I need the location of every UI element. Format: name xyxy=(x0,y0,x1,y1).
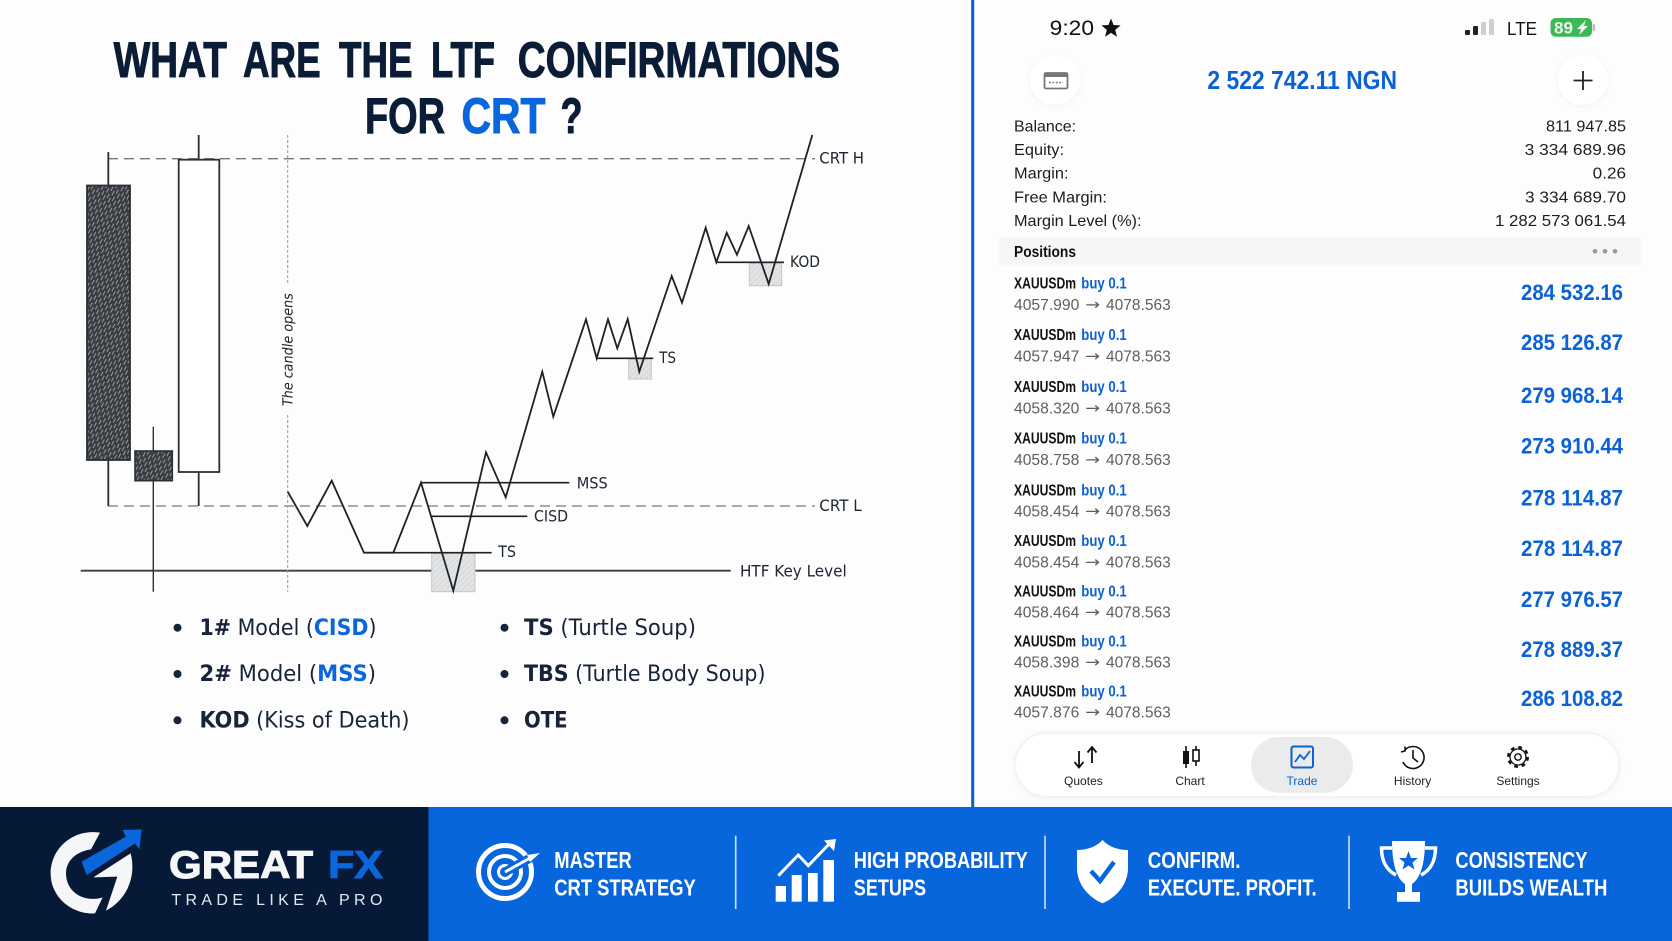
position 5: 278 114.87 xyxy=(1521,486,1623,511)
position 6: buy 0.1 xyxy=(1081,533,1127,550)
position 5: 4058.454 xyxy=(1014,504,1079,521)
feature: high probability setups xyxy=(776,839,1028,902)
account summary: Margin Level (%): xyxy=(1014,213,1142,230)
position 9: 286 108.82 xyxy=(1521,686,1623,711)
position 7: 277 976.57 xyxy=(1521,587,1623,612)
bearish large candle xyxy=(87,152,130,506)
tab labels: Settings xyxy=(1496,774,1540,788)
position 7 xyxy=(1014,583,1623,622)
position 6: → xyxy=(1085,553,1100,571)
bullet list: models: KOD (Kiss of Death) xyxy=(200,709,410,734)
icon: wallet button xyxy=(1030,55,1080,105)
chart labels: KOD xyxy=(790,252,820,271)
feature: master CRT strategy: CRT STRATEGY xyxy=(554,874,696,900)
chart labels: CRT H xyxy=(819,148,864,168)
brand name: GREAT xyxy=(169,844,313,887)
icon: growth chart xyxy=(776,839,836,902)
feature: consistency builds wealth xyxy=(1382,841,1607,902)
position 6 xyxy=(1014,533,1623,571)
tab labels xyxy=(1064,774,1540,788)
position 1: 284 532.16 xyxy=(1521,280,1623,305)
position 8: buy 0.1 xyxy=(1081,633,1127,650)
CRT H dashed level xyxy=(108,158,815,160)
brand name: FX xyxy=(328,844,383,887)
chart labels: CRT L xyxy=(819,496,862,515)
position 3: XAUUSDm xyxy=(1014,379,1076,396)
account summary xyxy=(1014,119,1626,230)
account summary: 0.26 xyxy=(1593,166,1626,183)
position 4 xyxy=(1014,431,1624,469)
position 9: XAUUSDm xyxy=(1014,684,1076,701)
feature: confirm execute profit: EXECUTE. PROFIT. xyxy=(1148,874,1317,900)
position 3: 4078.563 xyxy=(1106,401,1171,418)
position 4: 4078.563 xyxy=(1106,452,1171,469)
feature: consistency builds wealth: BUILDS WEALTH xyxy=(1455,874,1607,900)
panel: brand xyxy=(0,807,428,941)
position 8: 4078.563 xyxy=(1106,654,1171,671)
position 7: buy 0.1 xyxy=(1081,583,1127,600)
account summary: Margin: xyxy=(1014,166,1068,183)
position 7: → xyxy=(1085,603,1100,621)
position 8: 278 889.37 xyxy=(1521,637,1623,662)
bullet list: concepts: TBS (Turtle Body Soup) xyxy=(524,662,766,687)
position 5: buy 0.1 xyxy=(1081,483,1127,500)
title: FOR xyxy=(365,88,445,144)
position 7: XAUUSDm xyxy=(1014,583,1076,600)
icon: trade xyxy=(1292,746,1313,768)
feature: confirm execute profit: CONFIRM. xyxy=(1148,847,1240,873)
icon: settings xyxy=(1508,747,1528,767)
panel: mobile trading screenshot xyxy=(999,17,1641,797)
bullet list: concepts xyxy=(500,616,766,734)
position 3: 279 968.14 xyxy=(1521,383,1624,408)
title: THE xyxy=(339,32,413,88)
position 6: 278 114.87 xyxy=(1521,536,1623,561)
account summary: 3 334 689.96 xyxy=(1525,142,1626,159)
position 3 xyxy=(1014,379,1624,418)
bullet list: models xyxy=(174,616,410,734)
feature: high probability setups: SETUPS xyxy=(854,874,926,900)
position 2: XAUUSDm xyxy=(1014,327,1076,344)
active tab highlight xyxy=(1251,737,1353,793)
title: WHAT xyxy=(114,32,227,88)
position 9 xyxy=(1014,684,1623,722)
icon: plus button xyxy=(1558,55,1608,105)
account summary: Balance: xyxy=(1014,119,1076,136)
tab labels: History xyxy=(1394,774,1431,788)
chart labels: CISD xyxy=(534,506,568,525)
position 2: 4057.947 xyxy=(1014,349,1079,366)
panel divider xyxy=(971,0,974,808)
brand name xyxy=(169,844,383,887)
feature: confirm execute profit xyxy=(1077,840,1317,903)
footer band xyxy=(0,807,1672,941)
icon: chart xyxy=(1183,746,1199,768)
account summary: Free Margin: xyxy=(1014,189,1107,206)
position 4: 273 910.44 xyxy=(1521,434,1624,458)
gray zone: TS low xyxy=(432,553,475,592)
position 8 xyxy=(1014,633,1623,671)
status bar: 9:20 xyxy=(1050,17,1094,40)
CRT L dashed level xyxy=(108,505,815,507)
title: ARE xyxy=(243,32,321,88)
bullish white candle xyxy=(179,135,219,506)
status bar: LTE xyxy=(1507,19,1537,39)
position 2 xyxy=(1014,327,1623,366)
icon: shield with check xyxy=(1077,840,1128,903)
title: CONFIRMATIONS xyxy=(518,32,840,88)
position 2: buy 0.1 xyxy=(1081,327,1127,344)
position 8: → xyxy=(1085,653,1100,671)
panel: benefits xyxy=(428,807,1672,941)
icon: Great FX logo xyxy=(51,829,142,913)
bullet list: concepts: TS (Turtle Soup) xyxy=(524,616,696,641)
position 1 xyxy=(1014,275,1623,314)
position 1: XAUUSDm xyxy=(1014,275,1076,292)
position 3: buy 0.1 xyxy=(1081,379,1127,396)
title xyxy=(114,32,840,144)
bullet list: models: 1# Model (CISD) xyxy=(200,616,376,641)
position 1: 4078.563 xyxy=(1106,297,1171,314)
title: CRT xyxy=(462,88,546,144)
position 9: 4078.563 xyxy=(1106,705,1171,722)
account summary: 811 947.85 xyxy=(1546,119,1626,136)
position 9: → xyxy=(1085,703,1100,721)
account summary: 3 334 689.70 xyxy=(1525,189,1626,206)
feature: consistency builds wealth: CONSISTENCY xyxy=(1455,847,1587,873)
small candle xyxy=(135,427,172,592)
icon: history xyxy=(1401,746,1424,769)
status bar: 89 xyxy=(1554,18,1573,38)
title: ? xyxy=(560,88,582,144)
account summary: 1 282 573 061.54 xyxy=(1495,213,1626,230)
position 2: → xyxy=(1085,347,1100,365)
icon: trophy xyxy=(1382,841,1436,902)
position 3: 4058.320 xyxy=(1014,401,1079,418)
position rows xyxy=(1014,275,1624,722)
account summary: Equity: xyxy=(1014,142,1064,159)
feature: master CRT strategy xyxy=(478,846,696,900)
title: LTF xyxy=(431,32,495,88)
position 2: 4078.563 xyxy=(1106,349,1171,366)
position 4: 4058.758 xyxy=(1014,452,1079,469)
position 5: XAUUSDm xyxy=(1014,483,1076,500)
position 7: 4078.563 xyxy=(1106,605,1171,622)
position 1: 4057.990 xyxy=(1014,297,1079,314)
gray zone: TS mid xyxy=(629,359,651,379)
positions header xyxy=(999,237,1641,266)
structure lines xyxy=(393,262,784,553)
chart labels: TS xyxy=(497,542,516,561)
position 9: buy 0.1 xyxy=(1081,684,1127,701)
gray zone: KOD xyxy=(749,263,782,286)
label: the candle opens: The candle opens xyxy=(281,292,297,408)
position 6: XAUUSDm xyxy=(1014,533,1076,550)
position 6: 4058.454 xyxy=(1014,554,1079,571)
positions header: Positions xyxy=(1014,244,1076,261)
position 5: 4078.563 xyxy=(1106,504,1171,521)
chart labels: MSS xyxy=(577,473,608,492)
account balance: 2 522 742.11 NGN xyxy=(1207,65,1397,95)
tab bar xyxy=(1015,733,1619,797)
position 4: → xyxy=(1085,450,1100,468)
chart labels xyxy=(497,148,864,580)
position 4: XAUUSDm xyxy=(1014,431,1076,448)
icon: target xyxy=(478,846,540,898)
feature: high probability setups: HIGH PROBABILITY xyxy=(854,847,1028,873)
chart labels: TS xyxy=(658,348,676,367)
position 4: buy 0.1 xyxy=(1081,431,1127,448)
tab labels: Chart xyxy=(1175,774,1205,788)
status bar xyxy=(1050,17,1595,40)
bullet list: models: 2# Model (MSS) xyxy=(200,662,376,687)
position 2: 285 126.87 xyxy=(1521,330,1623,355)
position 5 xyxy=(1014,483,1623,521)
position 1: buy 0.1 xyxy=(1081,275,1127,292)
position 7: 4058.464 xyxy=(1014,605,1079,622)
price path xyxy=(288,135,812,591)
position 3: → xyxy=(1085,399,1100,417)
tagline: TRADE LIKE A PRO xyxy=(171,892,382,909)
bullet list: concepts: OTE xyxy=(524,709,568,734)
chart: CRT price action diagram xyxy=(81,135,864,592)
feature: master CRT strategy: MASTER xyxy=(554,847,632,873)
icon: quotes xyxy=(1074,747,1096,768)
position 8: XAUUSDm xyxy=(1014,633,1076,650)
position 6: 4078.563 xyxy=(1106,554,1171,571)
position 5: → xyxy=(1085,502,1100,520)
HTF key level line xyxy=(81,570,731,572)
tab labels: Trade xyxy=(1287,774,1318,788)
tab labels: Quotes xyxy=(1064,774,1103,788)
position 1: → xyxy=(1085,296,1100,314)
position 9: 4057.876 xyxy=(1014,705,1079,722)
candle open vertical line xyxy=(287,135,289,592)
position 8: 4058.398 xyxy=(1014,654,1079,671)
chart labels: HTF Key Level xyxy=(740,561,847,580)
